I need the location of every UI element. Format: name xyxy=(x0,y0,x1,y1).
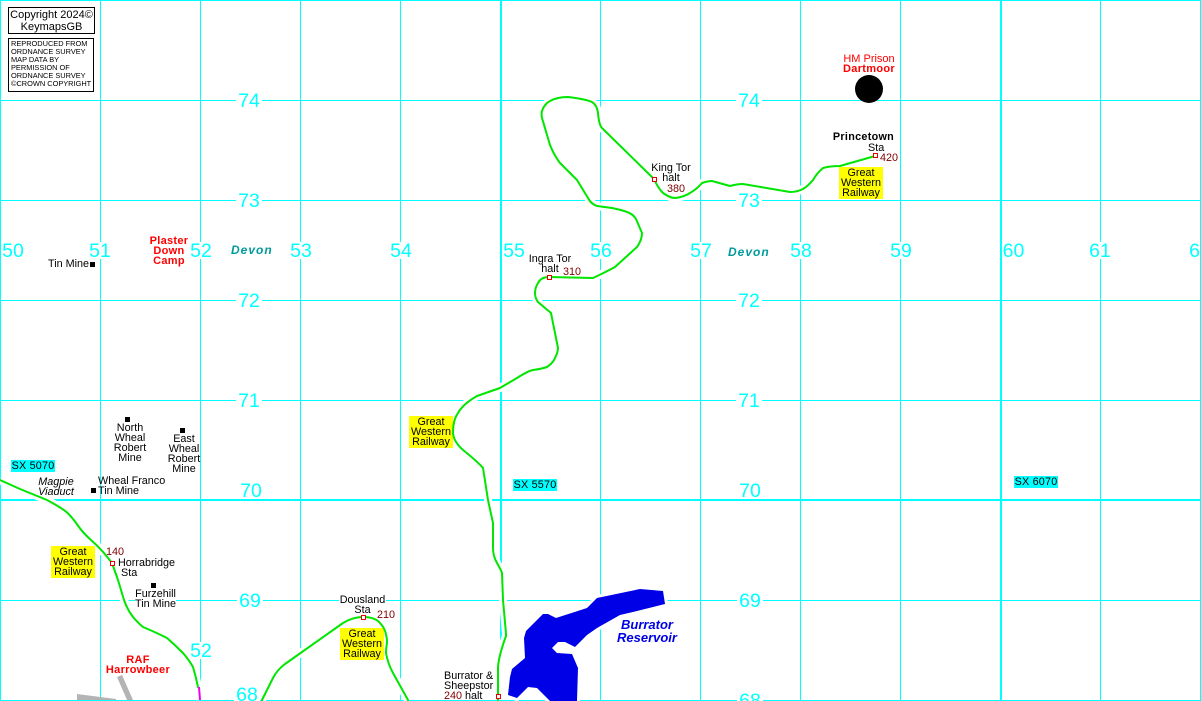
Ordnance Survey notice: ORDNANCE SURVEY xyxy=(11,47,86,56)
East Wheal Robert Mine site: Wheal xyxy=(169,443,199,455)
northing labels, west column xyxy=(234,92,263,701)
Dousland station label xyxy=(339,595,386,615)
Great Western Railway tag: mid-line: Railway xyxy=(412,436,450,448)
Great Western Railway tag: Dousland: Railway xyxy=(343,648,381,660)
Great Western Railway tag: mid-line: Western xyxy=(411,426,451,438)
King Tor halt label xyxy=(651,162,691,184)
copyright box xyxy=(8,7,95,34)
disused section of line xyxy=(199,687,200,700)
easting labels xyxy=(2,242,1200,259)
Great Western Railway tag: Dousland xyxy=(340,628,384,660)
Burrator and Sheepstor label: Burrator & xyxy=(444,670,493,682)
Burrator Reservoir label: Reservoir xyxy=(617,630,677,645)
Magpie Viaduct label: Magpie xyxy=(38,476,74,488)
Furzehill Tin Mine site: Furzehill xyxy=(135,588,176,600)
Magpie Viaduct label xyxy=(38,476,74,498)
Furzehill Tin Mine site: Tin Mine xyxy=(135,598,176,610)
label: Devon west: Devon xyxy=(231,243,273,257)
Great Western Railway tag: mid-line: Great xyxy=(417,416,444,428)
Great Western Railway tag: Princetown xyxy=(839,167,883,199)
Burrator and Sheepstor label xyxy=(444,670,494,701)
Great Western Railway tag: Princetown: Railway xyxy=(842,187,880,199)
Great Western Railway tag: Horrabridge xyxy=(51,546,95,578)
Burrator Reservoir label xyxy=(617,617,678,645)
Ingra Tor halt label: halt xyxy=(541,263,559,275)
Princetown station label: Sta xyxy=(868,142,884,154)
Horrabridge height: 140 xyxy=(106,546,124,558)
grid reference: SX 6070: SX 6070 xyxy=(1015,476,1057,488)
North Wheal Robert Mine site xyxy=(114,417,146,464)
HM Prison Dartmoor marker xyxy=(855,75,883,103)
North Wheal Robert Mine site: Wheal xyxy=(115,432,145,444)
Great Western Railway tag: Princetown: Western xyxy=(841,177,881,189)
label: Plaster Down Camp: Plaster xyxy=(150,235,188,247)
North Wheal Robert Mine site: Mine xyxy=(118,452,142,464)
Great Western Railway tag: Princetown: Great xyxy=(847,167,874,179)
grid reference: SX 5070: SX 5070 xyxy=(12,460,54,472)
Dousland height: 210 xyxy=(377,609,395,621)
Ingra Tor halt label xyxy=(529,253,572,275)
Ordnance Survey notice xyxy=(8,38,94,92)
Magpie Viaduct label: Viaduct xyxy=(38,486,74,498)
RAF Harrowbeer runways xyxy=(77,675,133,700)
Princetown height: 420 xyxy=(880,152,898,164)
Dousland station label: Dousland xyxy=(340,594,385,606)
grid reference: SX 5570: SX 5570 xyxy=(514,479,556,491)
East Wheal Robert Mine site xyxy=(168,428,200,475)
King Tor halt label: halt xyxy=(662,172,680,184)
copyright box: KeymapsGB xyxy=(21,21,82,33)
Ingra Tor height: 310 xyxy=(563,266,581,278)
HM Prison Dartmoor label xyxy=(843,53,895,75)
copyright box: Copyright 2024© xyxy=(10,9,93,21)
Dousland station label: Sta xyxy=(354,604,371,616)
HM Prison Dartmoor label: Dartmoor xyxy=(843,63,895,75)
Wheal Franco Tin Mine site: Wheal Franco xyxy=(98,475,165,487)
railway line xyxy=(0,97,875,700)
Horrabridge station label xyxy=(118,557,175,579)
label: Plaster Down Camp: Camp xyxy=(153,255,185,267)
East Wheal Robert Mine site: East xyxy=(173,433,195,445)
North Wheal Robert Mine site: Robert xyxy=(114,442,146,454)
label: Devon east: Devon xyxy=(728,245,770,259)
RAF Harrowbeer label: RAF xyxy=(126,654,150,666)
Ordnance Survey notice: ©CROWN COPYRIGHT xyxy=(11,79,91,88)
Ordnance Survey notice: ORDNANCE SURVEY xyxy=(11,71,86,80)
RAF Harrowbeer label: Harrowbeer xyxy=(106,664,170,676)
Wheal Franco Tin Mine site xyxy=(91,475,165,497)
Great Western Railway tag: Horrabridge: Railway xyxy=(54,566,92,578)
HM Prison Dartmoor label: HM Prison xyxy=(843,53,895,65)
East Wheal Robert Mine site: Robert xyxy=(168,453,200,465)
Burrator Reservoir xyxy=(508,589,665,701)
Ordnance Survey notice: PERMISSION OF xyxy=(11,63,70,72)
Ordnance Survey notice: REPRODUCED FROM xyxy=(11,39,87,48)
Wheal Franco Tin Mine site: Tin Mine xyxy=(98,485,139,497)
Great Western Railway tag: mid-line xyxy=(409,416,453,448)
Great Western Railway tag: Dousland: Western xyxy=(342,638,382,650)
Horrabridge station label: Horrabridge xyxy=(118,557,175,569)
RAF Harrowbeer label xyxy=(106,654,170,676)
Burrator Reservoir label: Burrator xyxy=(621,617,673,632)
Furzehill Tin Mine site xyxy=(135,583,176,610)
Burrator and Sheepstor label: Sheepstor xyxy=(444,680,493,692)
East Wheal Robert Mine site: Mine xyxy=(172,463,196,475)
Ordnance Survey notice: MAP DATA BY xyxy=(11,55,59,64)
Great Western Railway tag: Horrabridge: Western xyxy=(53,556,93,568)
Tin Mine site: Tin Mine xyxy=(48,258,89,270)
Ingra Tor halt label: Ingra Tor xyxy=(529,253,571,265)
Horrabridge station label: Sta xyxy=(121,567,137,579)
Great Western Railway tag: Dousland: Great xyxy=(348,628,376,640)
King Tor halt label: King Tor xyxy=(651,162,691,174)
label: Plaster Down Camp xyxy=(150,235,188,267)
label: Plaster Down Camp: Down xyxy=(153,245,185,257)
King Tor height: 380 xyxy=(667,183,685,195)
Great Western Railway tag: Horrabridge: Great xyxy=(59,546,86,558)
northing labels, east column xyxy=(736,92,763,701)
Princetown name: Princetown xyxy=(833,131,894,143)
North Wheal Robert Mine site: North xyxy=(117,422,143,434)
station markers xyxy=(110,154,878,698)
